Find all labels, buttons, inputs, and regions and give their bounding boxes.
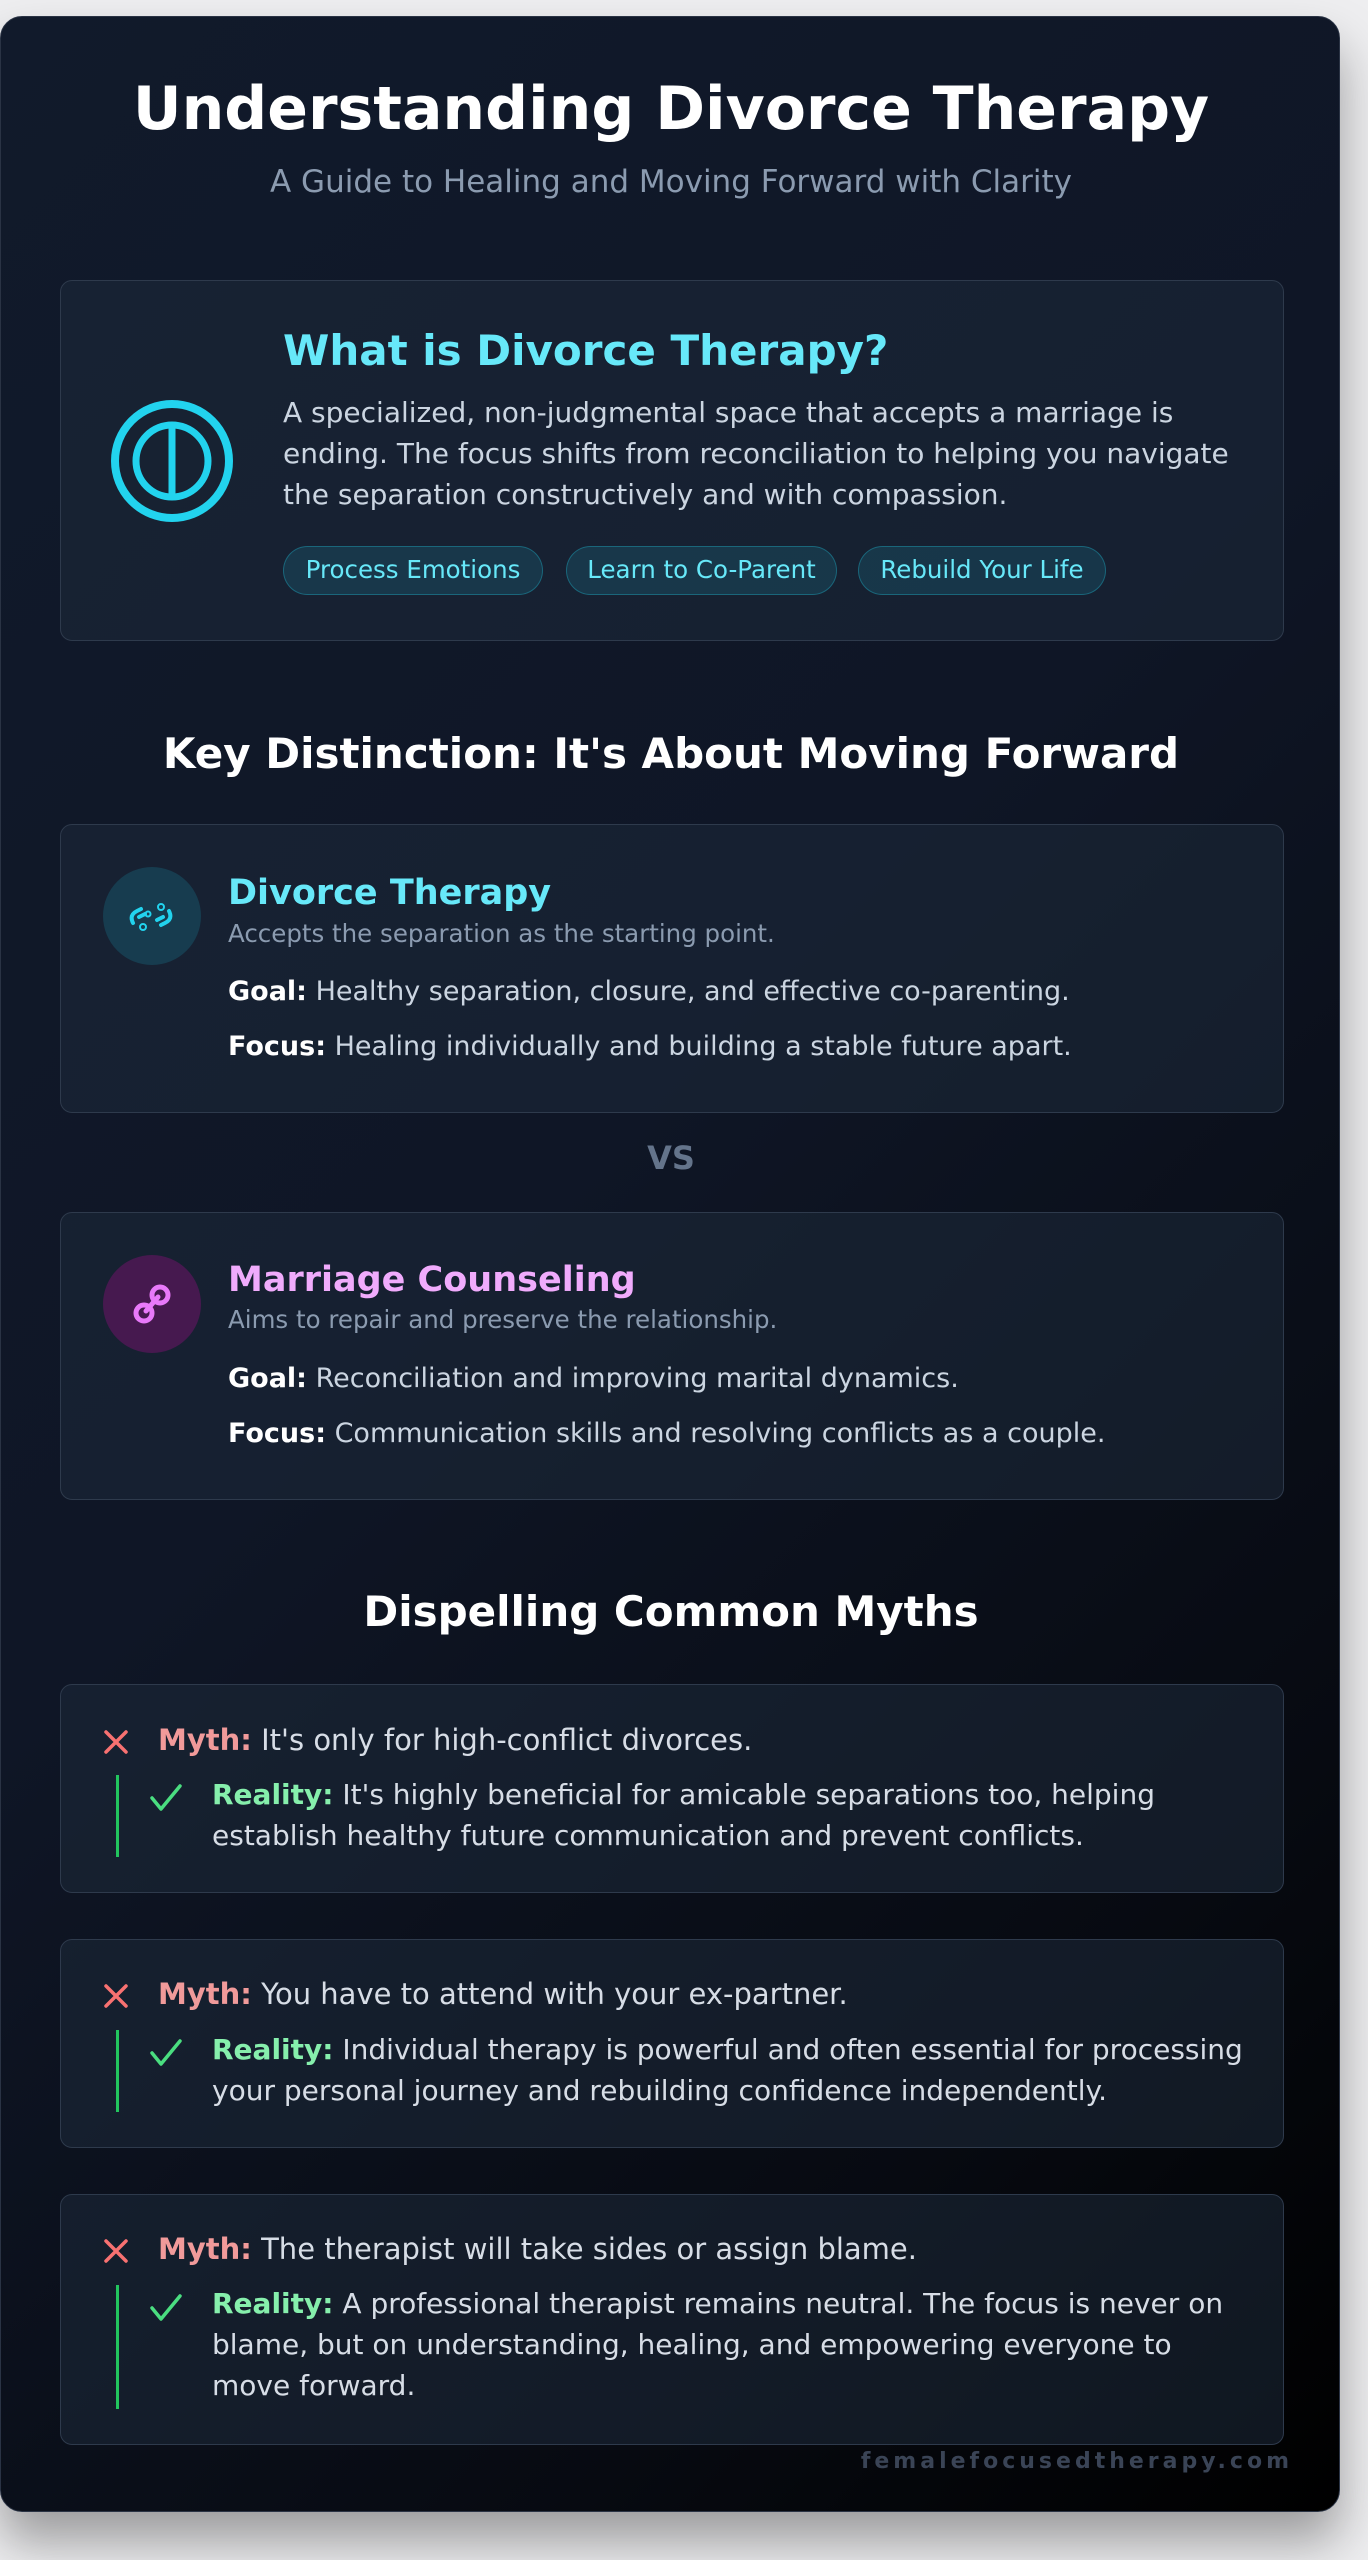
pill: rebuild: Rebuild Your Life (880, 555, 1084, 584)
reality 3 (212, 2287, 1223, 2402)
panel: myth 3 (60, 2194, 1284, 2445)
icon: check (150, 2039, 182, 2066)
focus line: Focus: Healing individually and building a stable future apart. (228, 1031, 1072, 1062)
icon: x (104, 1984, 128, 2008)
heading: key distinction: Key Distinction: It's About Moving Forward (163, 729, 1179, 778)
reality 1 (212, 1778, 1155, 1852)
icon: circle split (111, 400, 233, 522)
panel: what is divorce therapy (60, 280, 1284, 641)
reality 2: your personal journey and rebuilding confidence independently. (212, 2074, 1107, 2107)
heading: Marriage Counseling (228, 1260, 636, 1300)
panel: myth 1 (60, 1684, 1284, 1893)
myth 1 text: Myth: It's only for high-conflict divorces. (158, 1723, 752, 1757)
reality 1: Reality: It's highly beneficial for amicable separations too, helping (212, 1778, 1155, 1811)
icon: x (104, 1730, 128, 1754)
text block: A specialized, non-judgmental space that accepts a marriage is ending. The focus shifts from reconciliation to helping you navigate the separation constructively and with compassion. (283, 396, 1229, 511)
reality 3: blame, but on understanding, healing, and empowering everyone to (212, 2328, 1172, 2361)
myth 3 text: Myth: The therapist will take sides or assign blame. (158, 2232, 917, 2266)
heading: Divorce Therapy (228, 873, 551, 913)
pill: process emotions: Process Emotions (306, 555, 520, 584)
subtitle: A Guide to Healing and Moving Forward with Clarity (270, 164, 1072, 200)
myth 2 text: Myth: You have to attend with your ex-partner. (158, 1977, 848, 2011)
heading: What is Divorce Therapy? (283, 326, 888, 375)
icon: x (104, 2239, 128, 2263)
icon: link (103, 1255, 201, 1353)
footer: femalefocusedtherapy.com (861, 2449, 1293, 2474)
icon: broken link (103, 867, 201, 965)
focus line: Focus: Communication skills and resolving conflicts as a couple. (228, 1418, 1105, 1449)
pill: co-parent: Learn to Co-Parent (587, 555, 816, 584)
subtext: Aims to repair and preserve the relationship. (228, 1305, 777, 1334)
panel: marriage counseling (60, 1212, 1284, 1500)
reality 1: establish healthy future communication and prevent conflicts. (212, 1819, 1084, 1852)
subtext: Accepts the separation as the starting point. (228, 919, 775, 948)
reality 3: Reality: A professional therapist remains neutral. The focus is never on (212, 2287, 1223, 2320)
pill: co-parent (566, 546, 837, 595)
vs: VS (647, 1139, 695, 1177)
reality 2 (212, 2033, 1243, 2107)
icon: check (150, 1784, 182, 1811)
pill: process emotions (283, 546, 543, 595)
panel: myth 2 (60, 1939, 1284, 2148)
goal line: Goal: Reconciliation and improving marital dynamics. (228, 1363, 959, 1394)
pill: rebuild (858, 546, 1106, 595)
reality 3: move forward. (212, 2369, 415, 2402)
title: Understanding Divorce Therapy (133, 74, 1209, 144)
goal line: Goal: Healthy separation, closure, and effective co-parenting. (228, 976, 1070, 1007)
icon: check (150, 2294, 182, 2321)
reality 2: Reality: Individual therapy is powerful and often essential for processing (212, 2033, 1243, 2066)
heading: myths: Dispelling Common Myths (363, 1587, 979, 1636)
panel: divorce therapy (60, 824, 1284, 1113)
